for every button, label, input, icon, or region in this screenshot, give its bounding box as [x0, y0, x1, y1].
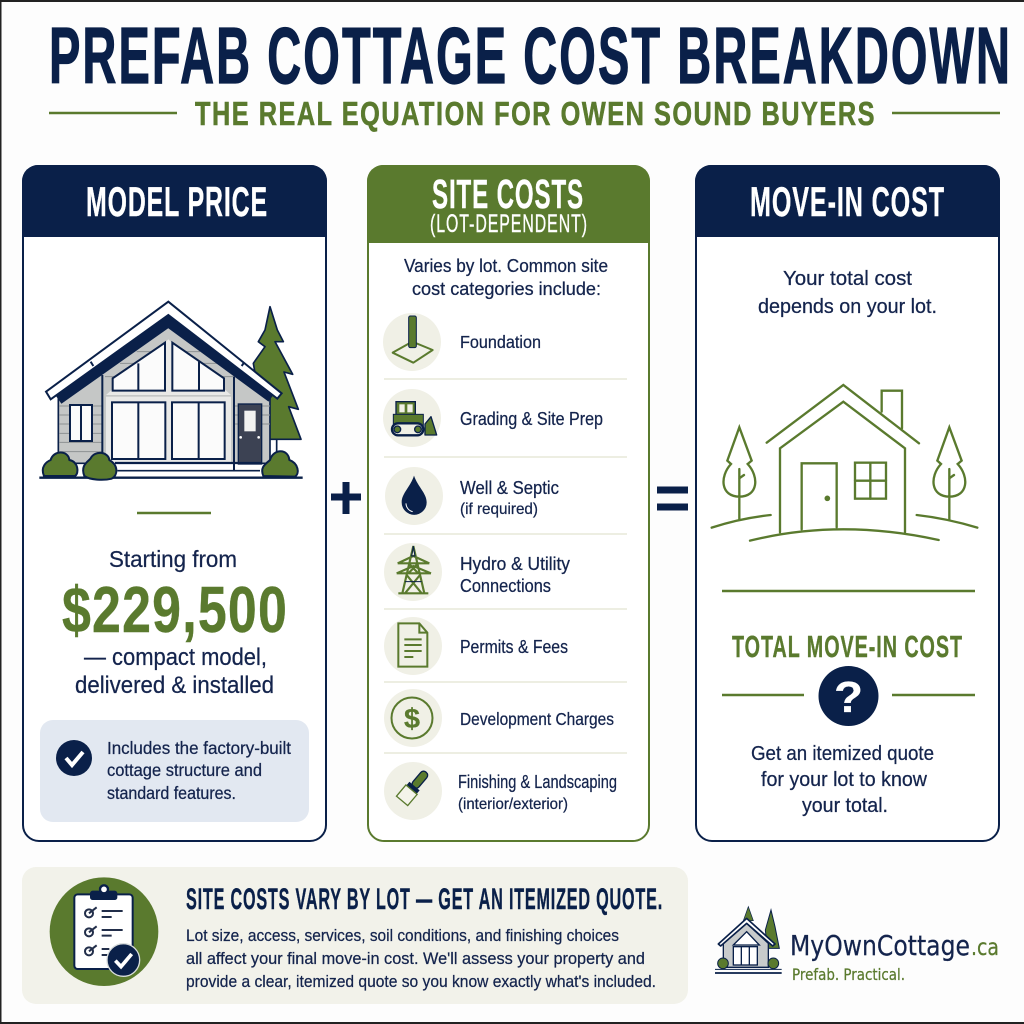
- banner body: all affect your final move-in cost. We'll assess your property and: [186, 949, 645, 968]
- get a quote text: [751, 742, 934, 817]
- logo: [715, 907, 999, 984]
- includes callout: [40, 720, 309, 822]
- icon: check: [56, 740, 92, 776]
- icon: document: [398, 623, 427, 667]
- item: well and septic: Well & Septic: [460, 478, 559, 498]
- icon: logo cottage: [715, 907, 782, 973]
- item: well and septic: (if required): [460, 501, 538, 518]
- model price header: MODEL PRICE: [86, 178, 268, 225]
- item: foundation: [393, 316, 541, 363]
- icon: paint brush: [396, 768, 432, 806]
- panel: move-in cost: [695, 165, 1000, 841]
- item: finishing: Finishing & Landscaping: [458, 772, 617, 792]
- item: grading: [392, 402, 603, 435]
- panel: itemized quote banner: [22, 867, 688, 1004]
- panel: site costs: [367, 165, 650, 841]
- move-in intro: Your total cost: [783, 267, 912, 290]
- site costs header: [367, 165, 650, 243]
- item: finishing: [396, 768, 617, 813]
- get a quote text: Get an itemized quote: [751, 742, 934, 765]
- icon: question mark: [818, 666, 878, 726]
- banner body: Lot size, access, services, soil conditions, and finishing choices: [186, 926, 619, 945]
- icon: house outline: [712, 385, 977, 541]
- item: development charges: Development Charges: [460, 709, 614, 729]
- icon: cottage illustration: [39, 302, 303, 480]
- price note: delivered & installed: [75, 672, 274, 699]
- move-in header: [695, 165, 1000, 237]
- item: permits: Permits & Fees: [460, 637, 568, 657]
- item: finishing: (interior/exterior): [458, 796, 568, 813]
- item: permits: [398, 623, 568, 667]
- site costs header: (LOT-DEPENDENT): [430, 210, 588, 238]
- icon: dollar: [392, 698, 432, 738]
- get a quote text: your total.: [802, 794, 888, 817]
- logo: .ca: [971, 935, 999, 961]
- move-in intro: depends on your lot.: [758, 295, 937, 318]
- icon: foundation: [393, 316, 433, 363]
- site costs intro: cost categories include:: [412, 279, 601, 299]
- logo: Prefab. Practical.: [792, 965, 905, 984]
- item: well and septic: [402, 476, 559, 518]
- price: $229,500: [62, 573, 288, 646]
- includes callout: standard features.: [107, 783, 236, 803]
- item: foundation: Foundation: [460, 332, 541, 352]
- includes callout: Includes the factory-built: [107, 738, 291, 758]
- banner body: provide a clear, itemized quote so you know exactly what's included.: [186, 972, 656, 991]
- logo: MyOwnCottage: [790, 929, 970, 962]
- panel: model price: [22, 165, 327, 841]
- get a quote text: for your lot to know: [761, 768, 927, 791]
- site costs intro: [404, 256, 608, 299]
- icon: dollar: $: [404, 703, 420, 734]
- icon: question mark: ?: [834, 673, 863, 722]
- item: hydro: Hydro & Utility: [460, 554, 570, 574]
- icon: hydro tower: [397, 546, 431, 593]
- site costs intro: Varies by lot. Common site: [404, 256, 608, 276]
- icon: water drop: [402, 476, 427, 515]
- equals sign: [657, 490, 688, 507]
- includes callout: cottage structure and: [107, 760, 262, 780]
- plus sign: [331, 482, 361, 514]
- banner body: [186, 926, 656, 991]
- item: hydro: [397, 546, 570, 596]
- move-in intro: [758, 267, 937, 318]
- site costs header: SITE COSTS: [432, 171, 584, 217]
- item: hydro: Connections: [460, 576, 551, 596]
- model price header: [22, 165, 327, 237]
- icon: clipboard: [50, 877, 158, 986]
- price note: [75, 644, 274, 699]
- item: grading: Grading & Site Prep: [460, 408, 603, 429]
- item: development charges: [392, 698, 614, 738]
- icon: bulldozer: [392, 402, 437, 435]
- price note: — compact model,: [84, 644, 267, 671]
- starting from: Starting from: [109, 546, 237, 572]
